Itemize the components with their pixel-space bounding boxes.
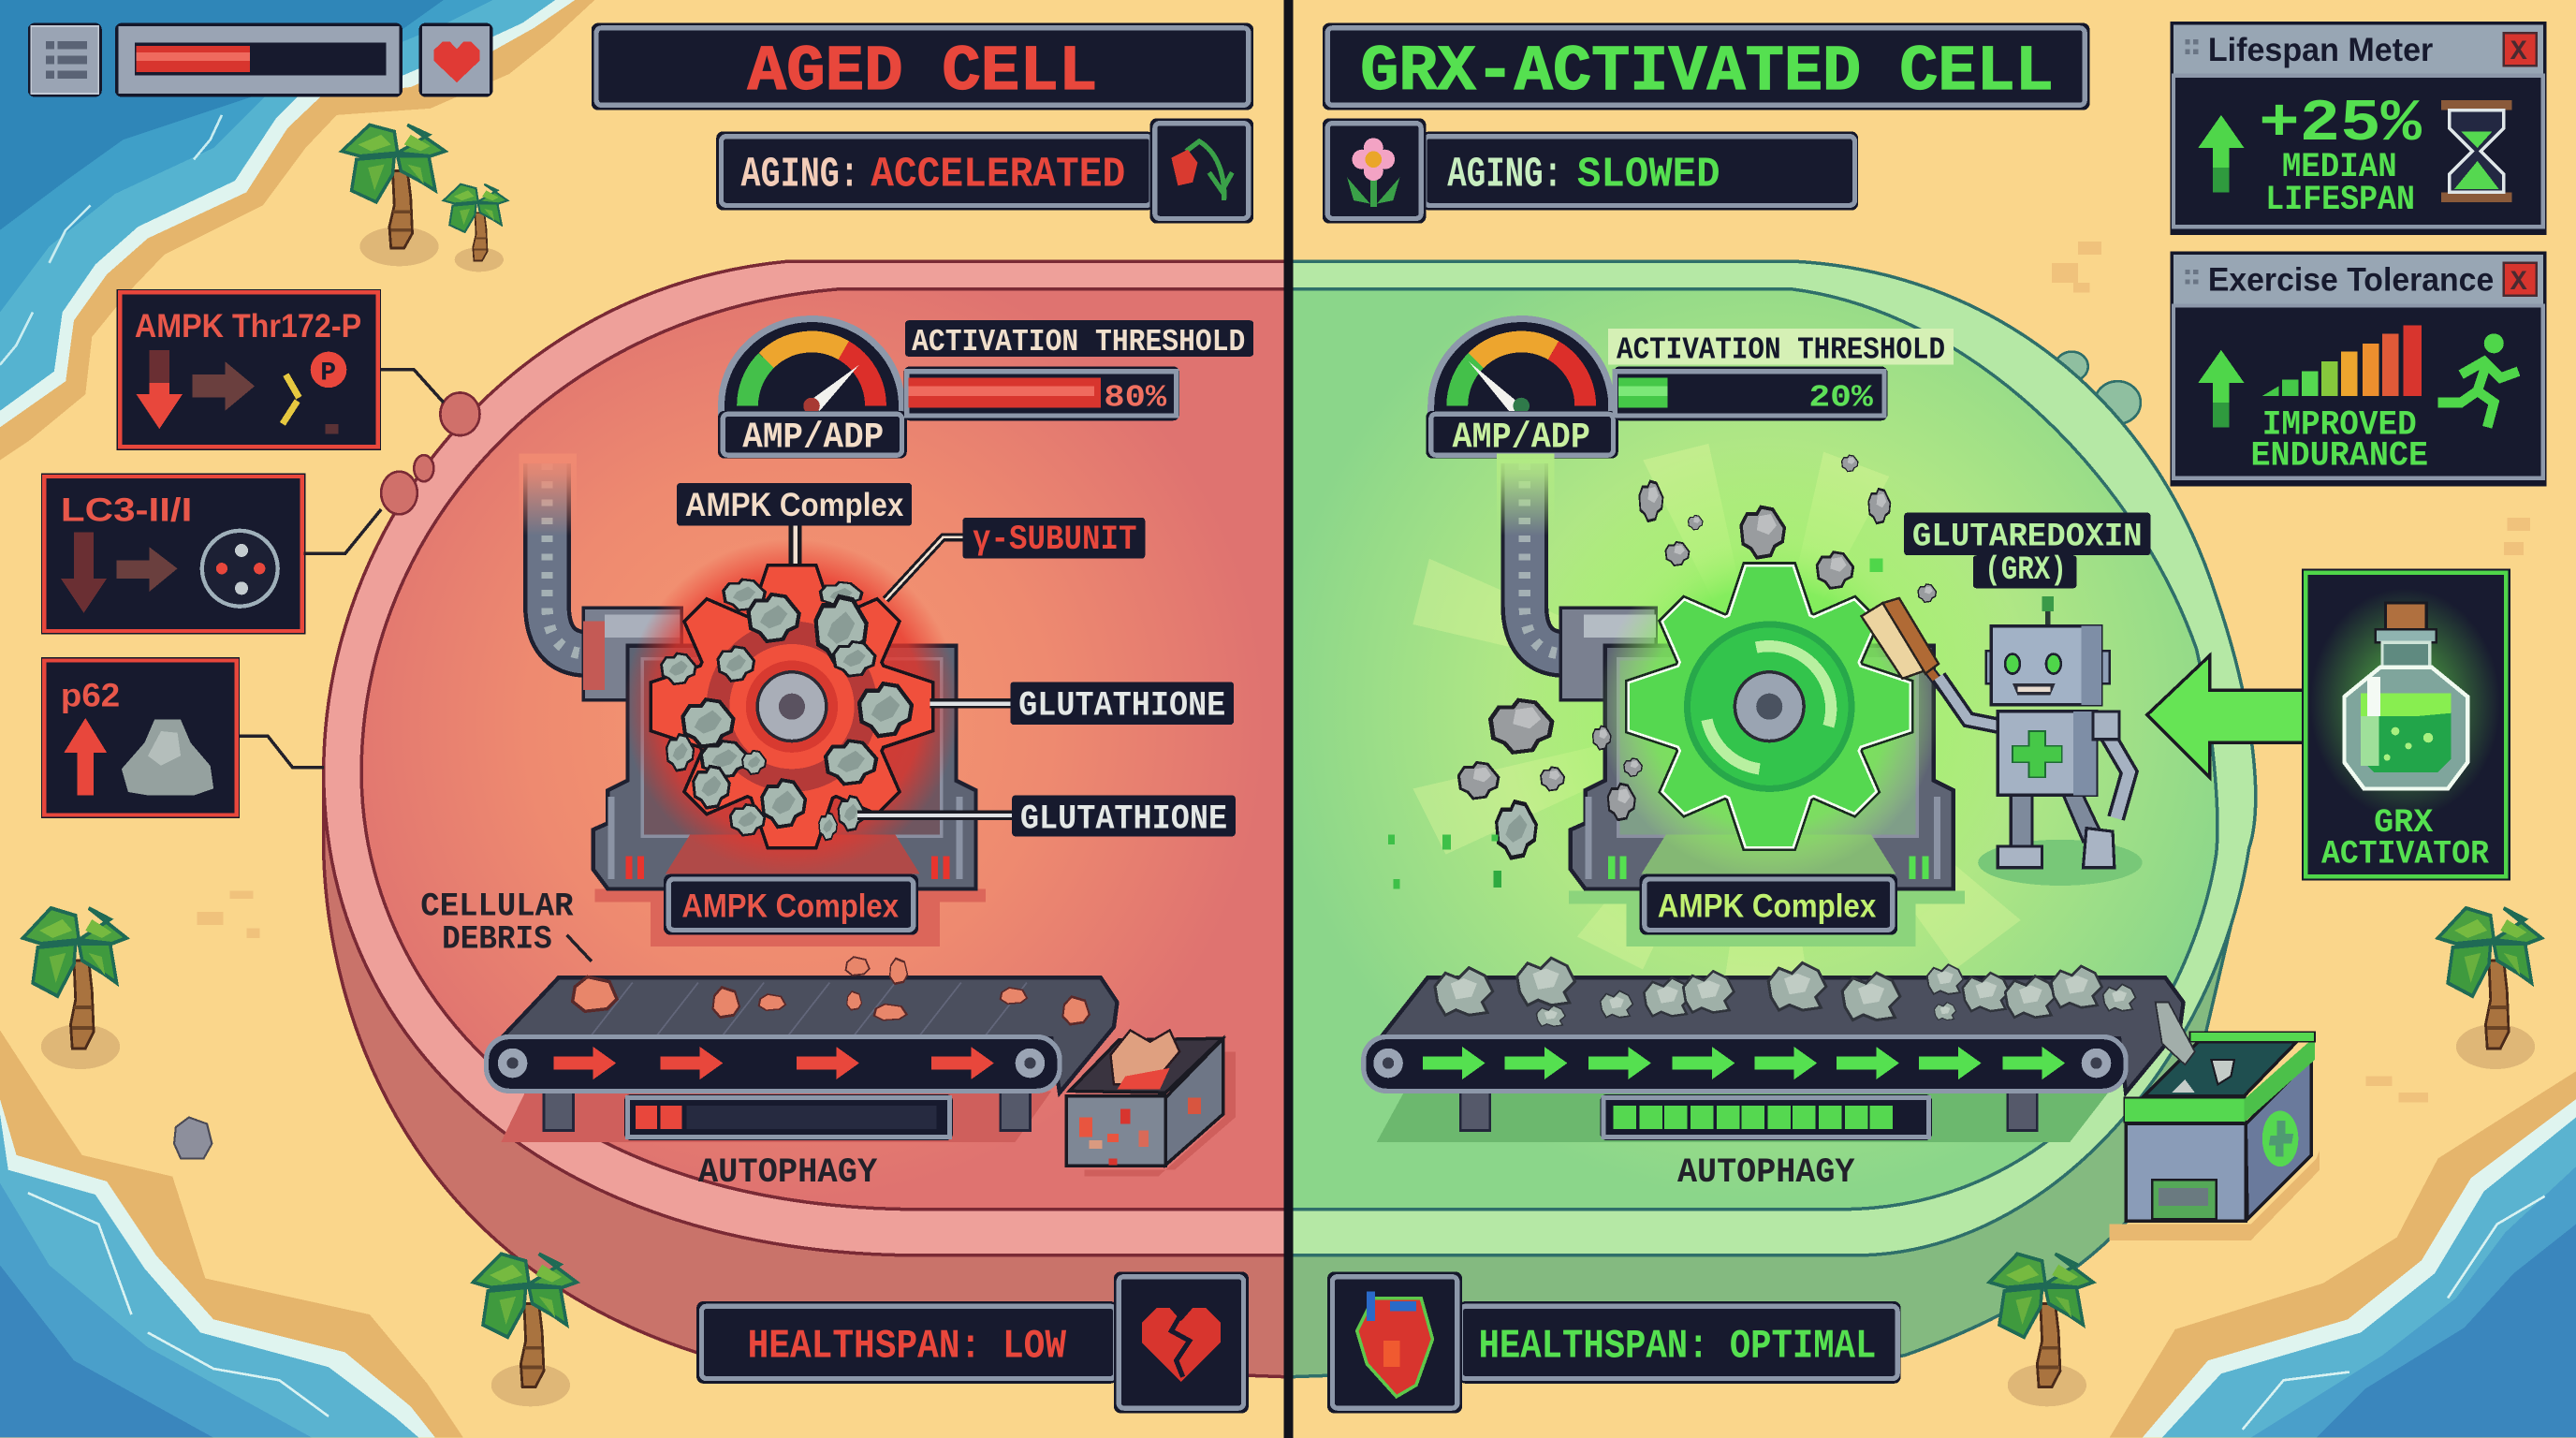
icon: phosphate key: [311, 352, 346, 388]
label: activation threshold (aged): ACTIVATION THRESHOLD: [912, 325, 1245, 360]
cell base extrusion: [324, 772, 1288, 1377]
window: lifespan meter: [2170, 22, 2546, 235]
icon: wilted flower: [1150, 118, 1253, 224]
right arrow: [192, 361, 255, 411]
panel: LC3-II/I: LC3-II/I: [61, 492, 192, 528]
bar: aged threshold 80%: 80%: [1104, 381, 1167, 417]
status: aging accelerated: ACCELERATED: [871, 150, 1125, 198]
cylinder: [583, 608, 681, 700]
legs: [544, 1091, 574, 1131]
status: aging accelerated: AGING:: [741, 150, 859, 198]
leader: LC3-II/I: [304, 509, 381, 553]
hose fade: [1497, 453, 1554, 536]
up arrow: [2198, 350, 2244, 427]
leader: AMPK Thr172-P: [381, 370, 444, 403]
robot: glutaredoxin: [1862, 596, 2143, 886]
cell base extrusion: [1288, 772, 2249, 1377]
legs: [1460, 1091, 1490, 1131]
HUD: health bar: [115, 23, 402, 97]
status: healthspan low: [696, 1271, 1249, 1413]
panel: p62: p62: [61, 678, 120, 714]
hose fade: [520, 453, 577, 536]
window: lifespan meter: MEDIAN: [2282, 148, 2397, 187]
rising bars: [2262, 326, 2422, 396]
machine: aged AMPK complex: [520, 453, 986, 946]
title: GRX-activated cell: GRX-ACTIVATED CELL: [1360, 36, 2054, 109]
rock pile: [122, 720, 213, 795]
head: [1986, 651, 1996, 683]
panel: AMPK Thr172-P: [117, 289, 381, 450]
progress bar: aged autophagy: [624, 1094, 953, 1140]
water: top-left shore: [0, 0, 594, 460]
gear with glutathione rocks: [624, 539, 959, 874]
bin: aged debris: [1066, 1030, 1236, 1177]
right face: [2246, 1058, 2311, 1219]
belt front: [487, 1036, 1060, 1091]
label: glutathione lower: GLUTATHIONE: [1020, 800, 1227, 840]
front face: [2126, 1123, 2246, 1221]
shoulder: [2093, 712, 2119, 740]
sand specks: [198, 242, 2530, 1103]
label: glutaredoxin (GRX): [1904, 513, 2150, 589]
label: glutaredoxin (GRX): GLUTAREDOXIN: [1912, 519, 2143, 556]
panel: GRX activator: [2302, 568, 2510, 881]
housing: [593, 646, 976, 889]
status: healthspan optimal: [1327, 1271, 1901, 1413]
label: AMPK complex (activated): [1640, 874, 1897, 935]
cytoplasm: [361, 289, 1288, 1210]
cylinder: [1560, 608, 1656, 700]
gauge: activated AMP/ADP: [1426, 319, 1618, 459]
panel: GRX activator: GRX: [2374, 804, 2434, 842]
palm trees: lower beach: [473, 1254, 2093, 1406]
arm right: [2106, 733, 2130, 818]
progress bar: activated autophagy: [1600, 1094, 1932, 1140]
window: lifespan meter: LIFESPAN: [2265, 181, 2415, 220]
emblem: [2262, 1110, 2298, 1167]
panel: AMPK Thr172-P: AMPK Thr172-P: [135, 308, 361, 345]
glutathione rocks: [662, 580, 912, 840]
debris rocks: [1435, 968, 1493, 1015]
belt top: [1380, 977, 2184, 1093]
housing: [1571, 646, 1954, 889]
arrow: activator to robot: [2147, 655, 2305, 777]
HUD: heart button: [419, 23, 493, 97]
label: glutathione upper: GLUTATHIONE: [1018, 686, 1225, 726]
status: aging accelerated: [716, 118, 1253, 224]
falling rocks: [2156, 1003, 2195, 1064]
label: AMPK complex (aged bottom): AMPK Complex: [681, 888, 899, 924]
body: [1998, 712, 2097, 795]
title: aged cell: [592, 23, 1253, 110]
status: aging slowed: SLOWED: [1577, 150, 1720, 198]
bar: activated threshold 20%: 20%: [1808, 381, 1874, 417]
right arrow: [117, 547, 178, 592]
icon: healthy heart: [1327, 1271, 1462, 1413]
title: aged cell: AGED CELL: [748, 36, 1097, 109]
belt front: [1364, 1036, 2126, 1091]
icon: hourglass: [2441, 100, 2512, 202]
cytoplasm: [1288, 289, 2217, 1210]
close button: X: [2510, 36, 2527, 67]
arrows: [553, 1047, 616, 1079]
status: healthspan optimal: HEALTHSPAN: OPTIMAL: [1479, 1324, 1876, 1371]
hose: [547, 463, 588, 654]
gear: [1599, 536, 1940, 877]
label: autophagy (aged): AUTOPHAGY: [698, 1153, 878, 1193]
panel: LC3-II/I: [41, 473, 305, 634]
membrane bumps: [2056, 352, 2141, 424]
arrows: [1423, 1047, 1486, 1079]
shadow: [1377, 1091, 2110, 1142]
cell membrane rim: [324, 261, 1288, 1255]
label: activation threshold (activated): ACTIVATION THRESHOLD: [1617, 333, 1945, 369]
membrane bumps: [381, 392, 479, 514]
shadow: [501, 1091, 1051, 1142]
close button: [2504, 263, 2537, 298]
up arrow: [2198, 115, 2244, 192]
leader: p62: [240, 736, 324, 768]
close button: X: [2510, 266, 2527, 298]
label: gamma subunit: [886, 518, 1145, 600]
gauge: activated AMP/ADP: AMP/ADP: [1453, 417, 1590, 458]
water: bottom-right shore: [2110, 1071, 2576, 1438]
machine: activated AMPK complex: [1388, 444, 2029, 970]
label: AMPK complex (aged top): AMPK Complex: [685, 487, 904, 523]
status: aging slowed: [1323, 118, 1858, 224]
down arrow: [61, 533, 107, 613]
label: AMPK complex (aged top): [677, 483, 912, 564]
pebble: [174, 1117, 212, 1158]
up arrow: [64, 718, 107, 795]
label: glutathione lower: [857, 795, 1236, 840]
gauge: aged AMP/ADP: [718, 319, 907, 459]
window: lifespan meter: Lifespan Meter: [2208, 32, 2434, 68]
label: AMPK complex (activated): AMPK Complex: [1658, 888, 1877, 924]
icon: autophagosome: [202, 531, 278, 607]
window: exercise tolerance: IMPROVED: [2262, 405, 2417, 445]
bar: activated threshold 20%: [1614, 366, 1888, 420]
panel: p62: [41, 657, 240, 818]
panel: aged cell body: [324, 261, 1288, 1377]
center divider: [1284, 0, 1293, 1438]
opening: [2144, 1042, 2297, 1096]
rim: [2124, 1097, 2246, 1123]
shadow: [1569, 890, 1965, 946]
bin: activated recycling: [2110, 1003, 2320, 1240]
panel: GRX activator: ACTIVATOR: [2321, 835, 2490, 873]
label: cellular debris: CELLULAR: [420, 888, 574, 926]
close button: [2504, 33, 2537, 67]
label: AMPK complex (aged bottom): [664, 874, 918, 935]
flying rocks: [1388, 455, 1936, 889]
panel: activated cell body: [1288, 261, 2256, 1377]
palm trees: upper and side beaches: [23, 125, 2541, 1069]
label: gamma subunit: γ-SUBUNIT: [973, 521, 1137, 560]
gauge: aged AMP/ADP: AMP/ADP: [742, 417, 884, 458]
icon: flower: [1323, 118, 1426, 224]
icon: broken heart: [1114, 1271, 1249, 1413]
debris: [573, 976, 617, 1011]
HUD: menu button: [28, 23, 102, 97]
conveyor: aged autophagy: [487, 957, 1117, 1142]
panel: AMPK Thr172-P: P: [320, 359, 336, 388]
window: exercise tolerance: ENDURANCE: [2250, 437, 2428, 477]
label: glutathione upper: [929, 682, 1234, 726]
water: bottom-left shore: [0, 1030, 463, 1438]
label: cellular debris: [420, 888, 592, 961]
conveyor: activated autophagy: [1364, 958, 2184, 1142]
label: autophagy (activated): AUTOPHAGY: [1677, 1153, 1855, 1193]
arm left: [1939, 677, 2001, 726]
label: cellular debris: DEBRIS: [442, 921, 552, 959]
door: [2152, 1180, 2217, 1219]
window: exercise tolerance: Exercise Tolerance: [2208, 262, 2494, 299]
down arrow: [137, 350, 183, 429]
window: lifespan meter: +25%: [2259, 90, 2422, 157]
light rays: [1412, 444, 2021, 977]
bar: aged threshold 80%: [903, 366, 1179, 420]
window: exercise tolerance: [2170, 252, 2546, 487]
status: aging slowed: AGING:: [1447, 150, 1562, 198]
shadow: [594, 889, 986, 946]
status: healthspan low: HEALTHSPAN: LOW: [748, 1324, 1067, 1371]
legs: [2011, 795, 2032, 848]
belt top: [501, 977, 1117, 1093]
icon: bottle: [2310, 588, 2500, 818]
icon: runner: [2438, 333, 2519, 427]
antenna: [2045, 605, 2050, 627]
cell membrane rim: [1288, 261, 2256, 1255]
bin shadow: [2110, 1151, 2320, 1240]
brush: [1925, 666, 1960, 710]
hose: [1525, 463, 1566, 654]
label: glutaredoxin (GRX): (GRX): [1984, 551, 2067, 589]
